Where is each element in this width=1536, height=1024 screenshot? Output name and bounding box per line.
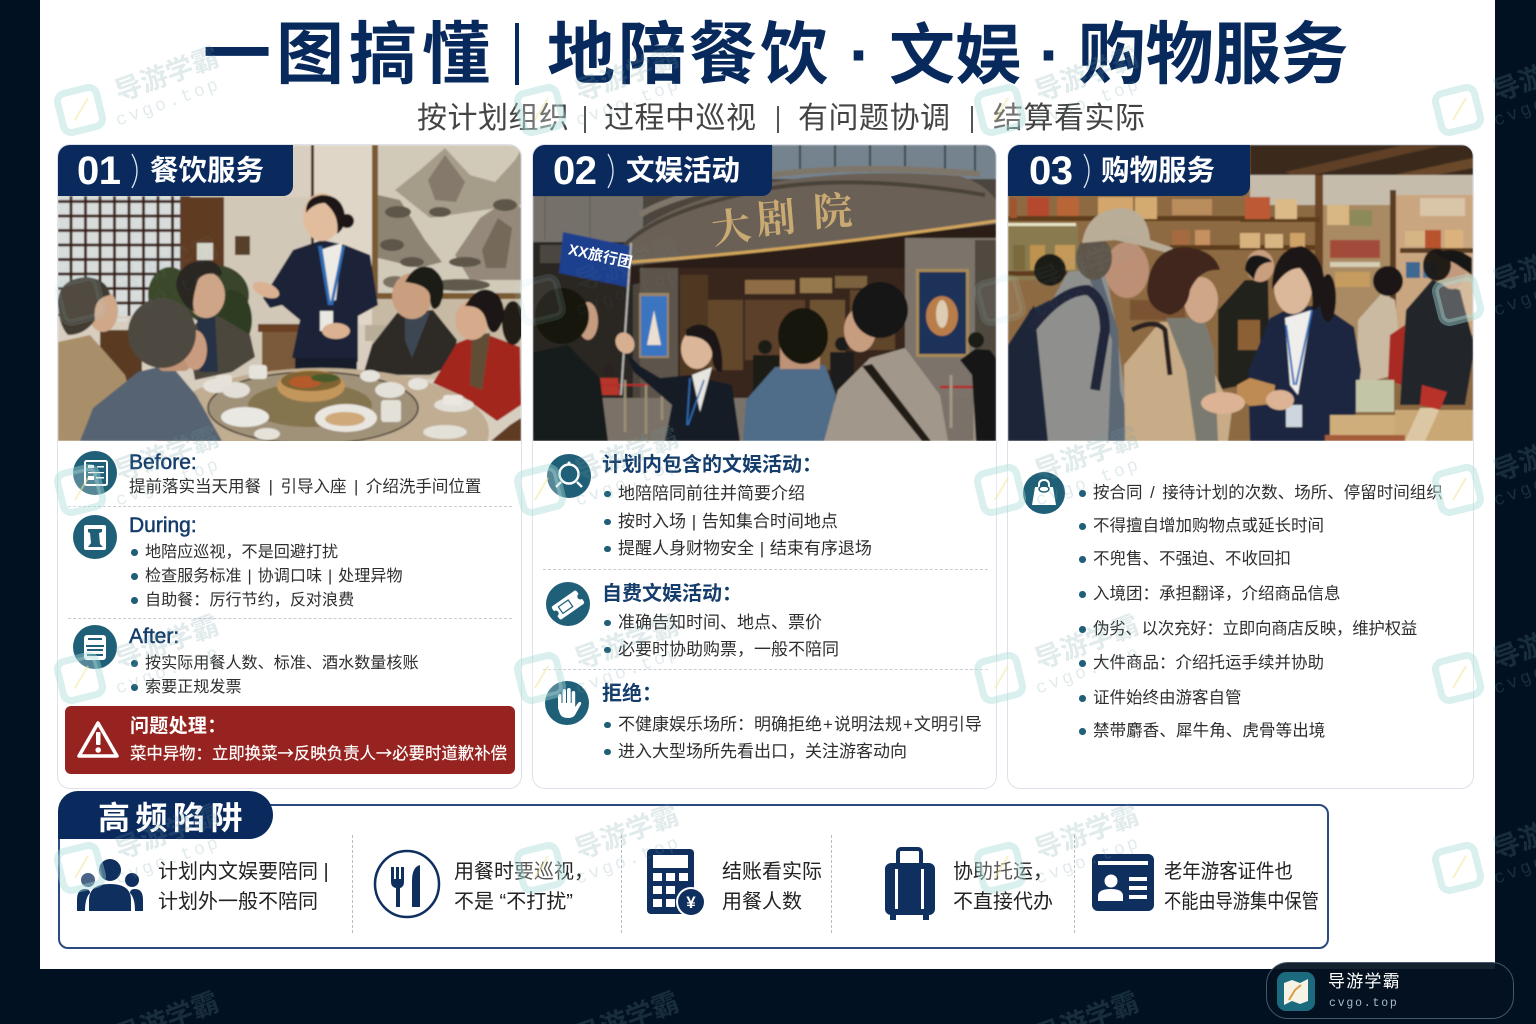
text: 不是 “不打扰” bbox=[454, 891, 573, 913]
back woman bbox=[1357, 293, 1400, 385]
watermark overlay: 导游学霸 bbox=[571, 422, 683, 487]
watermark overlay: 导游学霸 bbox=[111, 610, 223, 675]
shopping rules list: 不得擅自增加购物点或延长时间 bbox=[1093, 517, 1324, 535]
icon: before bbox=[73, 451, 117, 495]
subtitle: 结算看实际 bbox=[993, 102, 1146, 135]
watermark overlay: 导游学霸 bbox=[111, 232, 223, 297]
icon: fork and knife bbox=[374, 850, 440, 918]
watermark overlay: cvgo.top bbox=[113, 455, 224, 512]
watermark overlay: cvgo.top bbox=[573, 833, 684, 890]
right man bbox=[1400, 280, 1473, 405]
shopping rules list: 证件始终由游客自管 bbox=[1093, 689, 1242, 707]
watermark overlay: 导游学霸 bbox=[1031, 800, 1143, 865]
watermark overlay: cvgo.top bbox=[1033, 455, 1144, 512]
text: 不直接代办 bbox=[953, 891, 1053, 913]
back man left bbox=[1015, 300, 1050, 340]
paid activities list: 准确告知时间、地点、票价 bbox=[618, 613, 822, 632]
watermark overlay: cvgo.top bbox=[113, 75, 224, 132]
icon: suitcase bbox=[885, 847, 935, 920]
panel: 01 dining service: 自助餐：厉行节约，反对浪费 bbox=[145, 591, 354, 609]
guide bbox=[625, 352, 740, 441]
man in grey jacket bbox=[187, 312, 255, 380]
watermark overlay: cvgo.top bbox=[573, 455, 684, 512]
subtitle bbox=[417, 102, 1146, 135]
watermark overlay: 导游学霸 bbox=[571, 42, 683, 107]
icon: calculator with yen bbox=[647, 849, 704, 915]
back man centre bbox=[1218, 280, 1270, 390]
watermark overlay: cvgo.top bbox=[573, 643, 684, 700]
after heading: After: bbox=[129, 625, 179, 648]
icon: person search bbox=[547, 454, 591, 498]
icon: id card bbox=[1092, 854, 1154, 911]
panel: 01 dining service: 索要正规发票 bbox=[145, 678, 242, 696]
refusal heading: 拒绝： bbox=[602, 683, 662, 705]
title: · bbox=[849, 17, 872, 93]
traps heading tab: 高频陷阱 bbox=[98, 800, 248, 836]
woman in tan coat bbox=[1124, 322, 1232, 441]
photo: guide in gift shop bbox=[1008, 145, 1473, 441]
watermark overlay: 导游学霸 bbox=[1031, 610, 1143, 675]
title: 购物服务 bbox=[1078, 17, 1348, 93]
shop guide bbox=[1248, 305, 1361, 441]
shelves bbox=[1008, 216, 1248, 221]
right man bbox=[824, 348, 948, 441]
flag bbox=[621, 243, 631, 395]
section tab: 01: 餐饮服务 bbox=[150, 155, 264, 187]
theatre sign bbox=[709, 190, 853, 252]
watermark overlay: 导游学霸 bbox=[571, 610, 683, 675]
theatre sign: 大 bbox=[709, 204, 754, 252]
panel: 01 dining service bbox=[58, 145, 521, 788]
watermark overlay: cvgo.top bbox=[573, 265, 684, 322]
watermark overlay: 导游学霸 bbox=[571, 232, 683, 297]
table bbox=[155, 368, 489, 496]
trap text 5: 老年游客证件也 bbox=[1164, 861, 1293, 883]
text: 计划外一般不陪同 bbox=[158, 891, 318, 913]
icon: warning triangle bbox=[77, 721, 119, 758]
subtitle: 按计划组织 bbox=[417, 102, 570, 135]
section tab: 02 bbox=[533, 145, 772, 196]
shopping rules list: 禁带麝香、犀牛角、虎骨等出境 bbox=[1093, 722, 1325, 740]
shopping rules list: 大件商品：介绍托运手续并协助 bbox=[1093, 654, 1324, 672]
stacked goods bbox=[1356, 380, 1394, 412]
watermark overlay: cvgo.top bbox=[113, 833, 224, 890]
text: 用餐人数 bbox=[722, 891, 802, 913]
icon: ticket bbox=[546, 582, 590, 626]
trap text 3: 结账看实际 bbox=[722, 861, 822, 883]
icon: after bbox=[73, 625, 117, 669]
photo: grand theatre entrance bbox=[533, 145, 996, 441]
before text: 提前落实当天用餐 | 引导入座 | 介绍洗手间位置 bbox=[129, 478, 481, 496]
text: 不能由导游集中保管 bbox=[1164, 891, 1319, 913]
lobby figure bbox=[753, 355, 783, 400]
panel: high-frequency traps bbox=[58, 791, 1329, 949]
after list: 按实际用餐人数、标准、酒水数量核账 bbox=[145, 654, 419, 672]
section tab: 02: 02 bbox=[553, 149, 596, 193]
title: · bbox=[1039, 17, 1062, 93]
callout: problem handling bbox=[65, 706, 515, 774]
panel: 01 dining service: 检查服务标准 | 协调口味 | 处理异物 bbox=[145, 567, 403, 585]
watermark overlay: 导游学霸 bbox=[571, 800, 683, 865]
standing guide bbox=[263, 240, 378, 362]
title: 文娱 bbox=[889, 18, 1021, 92]
centre man bbox=[743, 365, 836, 441]
theatre sign: 院 bbox=[812, 190, 853, 235]
traps frame bbox=[58, 804, 1329, 949]
subtitle: 过程中巡视 bbox=[604, 102, 756, 135]
trap text 2: 用餐时要巡视， bbox=[454, 861, 594, 883]
section tab: 01: 01 bbox=[77, 149, 120, 193]
panel: 02 entertainment: 提醒人身财物安全 | 结束有序退场 bbox=[618, 539, 872, 558]
callout text: 菜中异物：立即换菜→反映负责人→必要时道歉补偿 bbox=[130, 740, 507, 764]
flag text: XX旅行团 bbox=[567, 240, 634, 272]
watermark overlay: cvgo.top bbox=[1033, 833, 1144, 890]
left man bbox=[533, 345, 608, 441]
traps heading tab bbox=[58, 791, 273, 839]
watermark overlay: 导游学霸 bbox=[111, 42, 223, 107]
panel: 02 entertainment: 按时入场 | 告知集合时间地点 bbox=[618, 512, 838, 531]
section tab: 03: 购物服务 bbox=[1101, 155, 1215, 187]
title bbox=[203, 17, 1348, 93]
subtitle: 有问题协调 bbox=[798, 102, 950, 135]
panel: 02 entertainment bbox=[533, 145, 996, 788]
theatre sign: 剧 bbox=[755, 196, 797, 243]
watermark overlay: 导游学霸 bbox=[1031, 422, 1143, 487]
panel: 02 entertainment: 进入大型场所先看出口，关注游客动向 bbox=[618, 742, 907, 761]
icon: group of people bbox=[77, 859, 143, 911]
during heading: During: bbox=[129, 514, 197, 537]
watermark overlay: 导游学霸 bbox=[1031, 232, 1143, 297]
ink landscape bbox=[395, 148, 521, 218]
watermark overlay: 导游学霸 bbox=[1031, 42, 1143, 107]
watermark overlay: 导游学霸 bbox=[111, 800, 223, 865]
watermark overlay: cvgo.top bbox=[1033, 643, 1144, 700]
right man bbox=[363, 310, 457, 375]
old man bbox=[1020, 268, 1132, 441]
watermark overlay: cvgo.top bbox=[573, 75, 684, 132]
box and hands bbox=[1237, 378, 1275, 406]
shopping rules list: 按合同 / 接待计划的次数、场所、停留时间组织 bbox=[1093, 484, 1443, 502]
during list: 地陪应巡视，不是回避打扰 bbox=[145, 543, 338, 561]
brand url: cvgo.top bbox=[1329, 997, 1399, 1010]
before heading: Before: bbox=[129, 451, 197, 474]
included activities heading: 计划内包含的文娱活动： bbox=[602, 454, 822, 476]
panel: 02 entertainment: 必要时协助购票，一般不陪同 bbox=[618, 640, 839, 659]
watermark overlay: cvgo.top bbox=[1033, 265, 1144, 322]
shopping rules list bbox=[1079, 484, 1443, 740]
refusal list: 不健康娱乐场所：明确拒绝+说明法规+文明引导 bbox=[618, 715, 982, 734]
shopping rules list: 伪劣、以次充好：立即向商店反映，维护权益 bbox=[1093, 620, 1417, 638]
title: 地陪餐饮 bbox=[547, 17, 831, 93]
icon: shopping bag bbox=[1023, 472, 1065, 514]
panel: 03 shopping bbox=[1008, 145, 1473, 788]
shopping rules list: 入境团：承担翻译，介绍商品信息 bbox=[1093, 585, 1340, 603]
brand badge bbox=[1266, 962, 1514, 1019]
trap text 1: 计划内文娱要陪同 | bbox=[158, 861, 329, 883]
trap text 4: 协助托运， bbox=[953, 861, 1053, 883]
section tab: 01 bbox=[58, 145, 293, 196]
brand name: 导游学霸 bbox=[1328, 972, 1401, 991]
icon: during bbox=[73, 515, 117, 559]
callout heading: 问题处理： bbox=[130, 716, 227, 737]
photo: guide at dining table bbox=[58, 145, 521, 441]
section tab: 02: 文娱活动 bbox=[626, 155, 740, 187]
section tab: 03 bbox=[1008, 145, 1250, 196]
icon: calculator with yen: ¥ bbox=[686, 893, 696, 912]
red coat woman bbox=[433, 333, 521, 421]
watermark overlay: cvgo.top bbox=[1033, 75, 1144, 132]
icon: raised hand bbox=[545, 681, 589, 725]
title: 一图搞懂 bbox=[203, 17, 495, 93]
rope & small figure bbox=[600, 378, 620, 395]
left woman bbox=[58, 335, 128, 441]
watermark overlay: cvgo.top bbox=[113, 265, 224, 322]
watermark overlay: 导游学霸 bbox=[111, 422, 223, 487]
watermark overlay: cvgo.top bbox=[113, 643, 224, 700]
included activities list: 地陪陪同前往并简要介绍 bbox=[618, 484, 805, 503]
man seen from behind bbox=[80, 364, 222, 441]
paid activities heading: 自费文娱活动： bbox=[602, 583, 742, 605]
icon: brand map bbox=[1277, 972, 1315, 1011]
section tab: 03: 03 bbox=[1029, 149, 1072, 193]
shopping rules list: 不兜售、不强迫、不收回扣 bbox=[1093, 550, 1291, 568]
